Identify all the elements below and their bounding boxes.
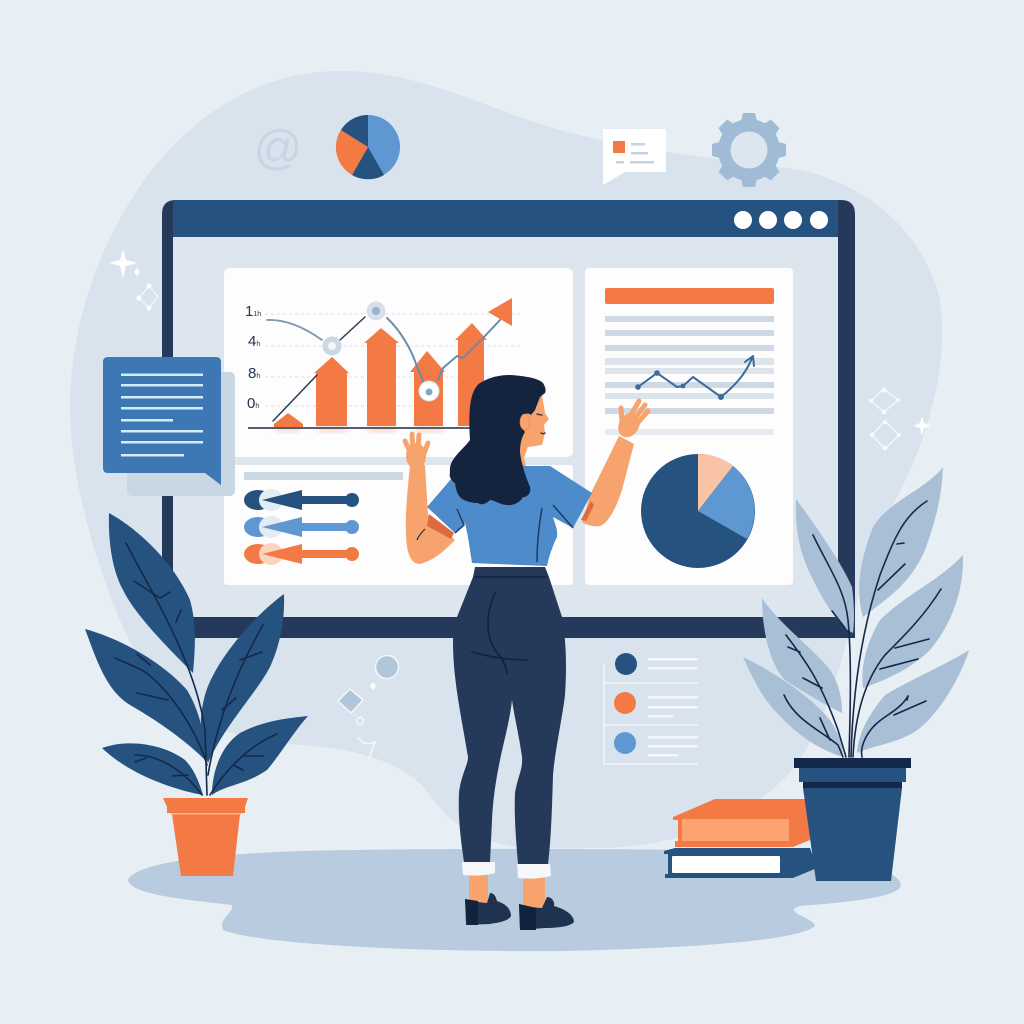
chart nodes — [322, 302, 439, 401]
hair — [450, 375, 546, 505]
blue note with shadow — [103, 357, 235, 496]
neck and face — [520, 395, 549, 470]
arrow bars — [274, 298, 512, 427]
plant leaves — [85, 513, 308, 795]
plant pot — [163, 798, 248, 876]
window buttons — [734, 211, 828, 229]
icon: gear — [712, 113, 786, 187]
panel: arrow list — [224, 465, 573, 585]
bar shadows — [276, 426, 443, 432]
ankles — [469, 875, 545, 909]
light blue arrow row — [244, 516, 359, 538]
axis gridlines — [265, 314, 520, 406]
line chart — [635, 356, 754, 400]
sparkles left — [109, 249, 158, 310]
plant pot — [794, 758, 911, 881]
plant veins — [784, 501, 941, 757]
back hand — [405, 434, 428, 469]
report heading — [605, 288, 774, 304]
icon: small pie chart — [336, 115, 400, 179]
top icons — [254, 113, 786, 187]
panel: report and pie — [585, 268, 793, 585]
trend lines — [267, 317, 500, 421]
elbow crease — [417, 529, 425, 540]
person — [405, 375, 648, 930]
monitor — [162, 200, 855, 638]
face details — [537, 414, 545, 434]
trousers — [453, 567, 566, 864]
sleeve cuffs — [427, 501, 594, 539]
sparkles right — [869, 388, 931, 450]
axis labels: 8h — [248, 365, 260, 382]
panel: bar chart — [224, 268, 573, 457]
ear — [520, 414, 530, 430]
shoes — [465, 893, 574, 930]
plant leaves — [743, 467, 969, 757]
axis labels: 4h — [248, 333, 260, 350]
raised arm — [582, 436, 634, 526]
background blob — [70, 71, 942, 848]
monitor frame — [162, 200, 855, 638]
blue book — [664, 848, 817, 878]
orange arrow row — [244, 543, 359, 565]
monitor screen — [173, 237, 838, 617]
trouser folds — [472, 577, 546, 673]
raised hand — [614, 401, 648, 441]
monitor title bar — [173, 200, 838, 237]
legend list — [604, 653, 698, 764]
large pie chart — [641, 454, 755, 568]
baseline — [248, 427, 472, 429]
trouser cuffs — [462, 862, 551, 879]
dark arrow row — [244, 489, 359, 511]
icon: at sign: @ — [254, 122, 302, 175]
ground shadow — [128, 849, 901, 951]
plant veins — [115, 543, 277, 795]
icon: speech bubble — [603, 129, 666, 185]
axis labels — [245, 303, 261, 412]
left plant — [85, 513, 308, 876]
floating shapes — [338, 656, 398, 759]
shirt — [427, 466, 592, 566]
axis labels: 11h — [245, 303, 261, 320]
orange book — [673, 799, 810, 847]
report lines — [605, 316, 774, 435]
axis labels: 0h — [247, 395, 259, 412]
right plant — [743, 467, 969, 881]
books — [664, 799, 817, 878]
back arm — [406, 465, 455, 564]
shirt seams — [455, 505, 573, 562]
